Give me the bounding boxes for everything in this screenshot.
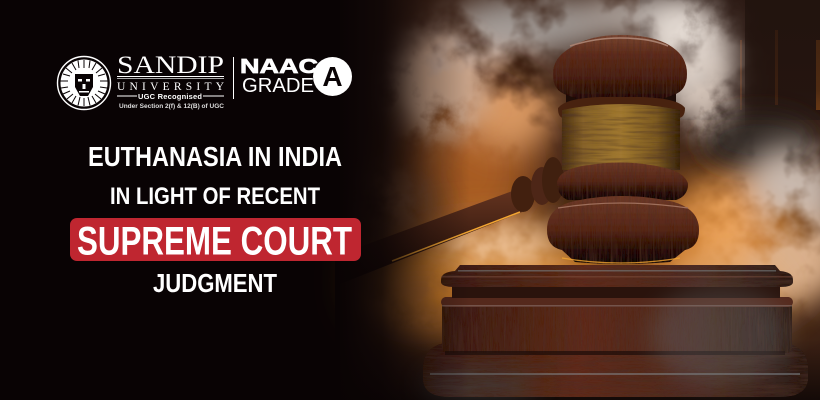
- university name: SANDIP: [117, 52, 224, 79]
- title line 4: JUDGMENT: [153, 270, 277, 298]
- gavel handle: [335, 157, 564, 286]
- title line 2: IN LIGHT OF RECENT: [110, 183, 320, 210]
- title line 1: EUTHANASIA IN INDIA: [88, 141, 342, 172]
- highlighted title: SUPREME COURT: [77, 220, 352, 264]
- university subtitle: UNIVERSITY: [117, 81, 225, 93]
- gavel head: [547, 35, 699, 264]
- icon: lion emblem: [58, 56, 110, 110]
- NAAC label: NAAC: [240, 56, 318, 78]
- grade label: GRADE: [242, 75, 314, 97]
- UGC section note: Under Section 2(f) & 12(B) of UGC: [119, 103, 225, 110]
- grade badge: A: [322, 61, 343, 92]
- UGC recognised: UGC Recognised: [138, 92, 202, 101]
- dark wood panels upper right: [745, 0, 820, 130]
- courtroom scene background: [340, 0, 820, 400]
- smoke: [365, 0, 820, 325]
- left fade: [335, 0, 470, 400]
- university logo: [58, 52, 352, 110]
- gavel sound block: [420, 265, 808, 400]
- grade badge: [313, 57, 352, 96]
